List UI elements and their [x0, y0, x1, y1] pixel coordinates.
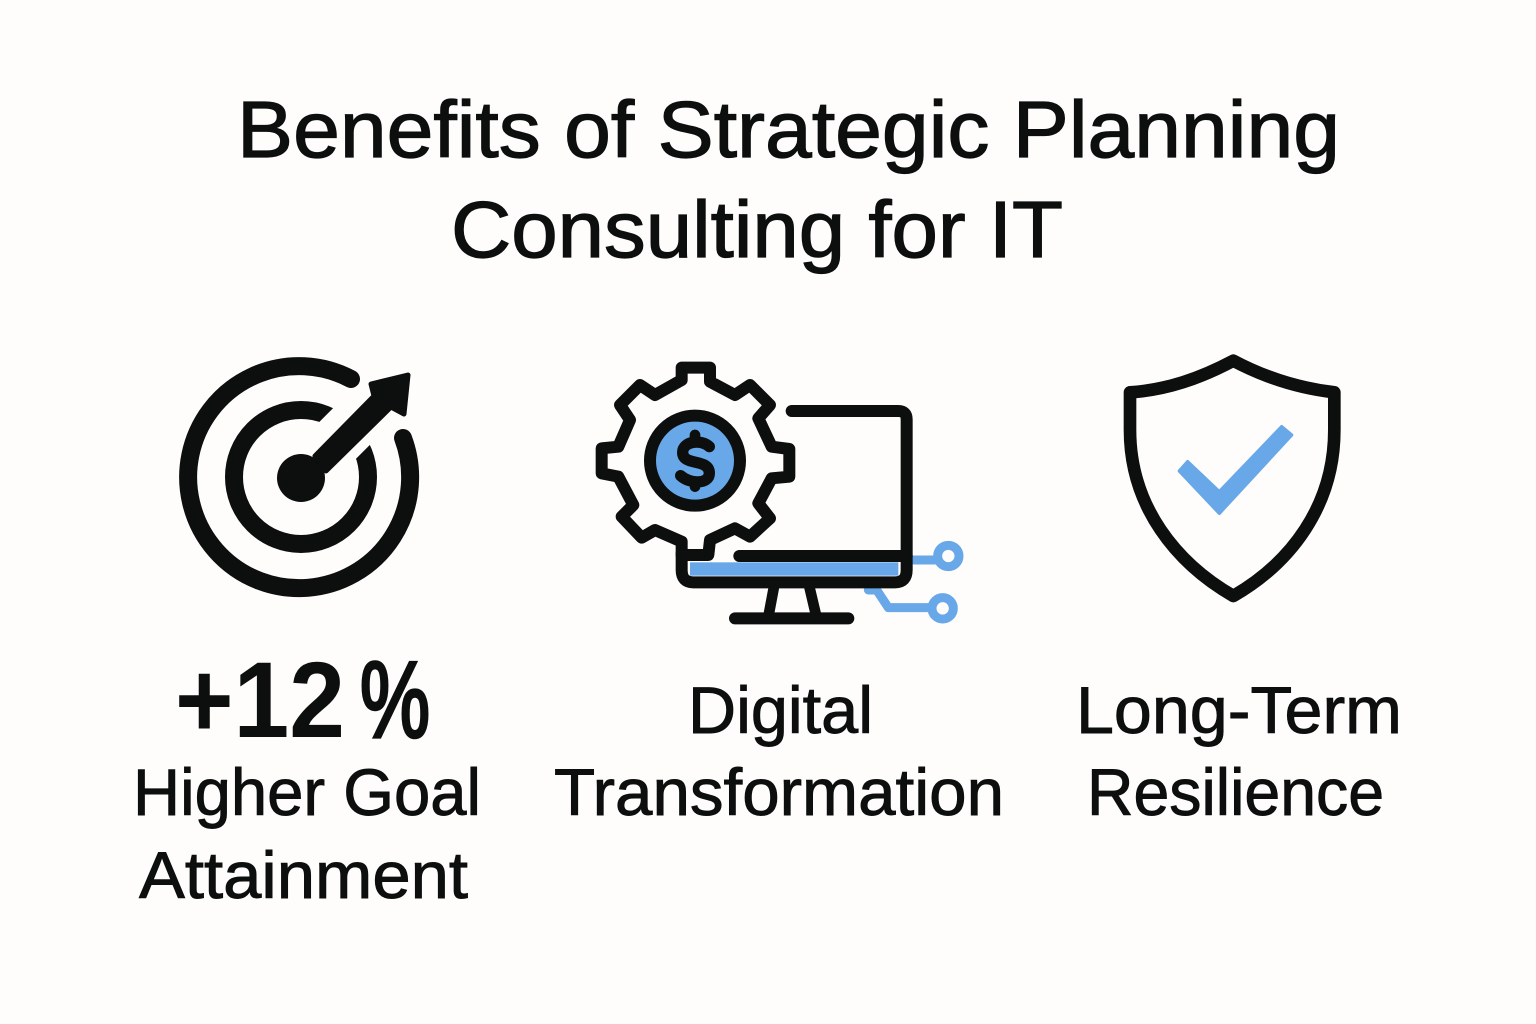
- panel: long-term resilience: [1076, 361, 1402, 829]
- panel: goal attainment: [133, 366, 481, 912]
- label: Higher Goal Attainment: Higher Goal: [133, 755, 481, 829]
- title: [237, 85, 1340, 274]
- monitor screen bar: [690, 562, 898, 576]
- title: Consulting for IT: [451, 185, 1063, 274]
- monitor frame: [682, 411, 907, 618]
- label: Higher Goal Attainment: Attainment: [139, 838, 468, 912]
- label: Digital Transformation: Digital: [688, 673, 873, 747]
- label: Higher Goal Attainment: [133, 755, 481, 912]
- dollar coin: [650, 416, 740, 506]
- title: Benefits of Strategic Planning: [237, 85, 1340, 174]
- stat: +12%: +12: [175, 639, 345, 760]
- icon: target with arrow: [188, 366, 410, 588]
- label: Digital Transformation: [554, 673, 1004, 829]
- gear: [602, 368, 789, 555]
- label: Long-Term Resilience: [1076, 673, 1402, 829]
- icon: shield with check: [1130, 361, 1334, 596]
- stat: +12%: %: [360, 639, 430, 760]
- label: Digital Transformation: Transformation: [554, 755, 1004, 829]
- circuit connectors: [868, 545, 959, 619]
- label: Long-Term Resilience: Resilience: [1087, 755, 1384, 829]
- panel: digital transformation: [554, 368, 1004, 829]
- icon: gear and monitor: [602, 368, 959, 619]
- label: Long-Term Resilience: Long-Term: [1076, 673, 1402, 747]
